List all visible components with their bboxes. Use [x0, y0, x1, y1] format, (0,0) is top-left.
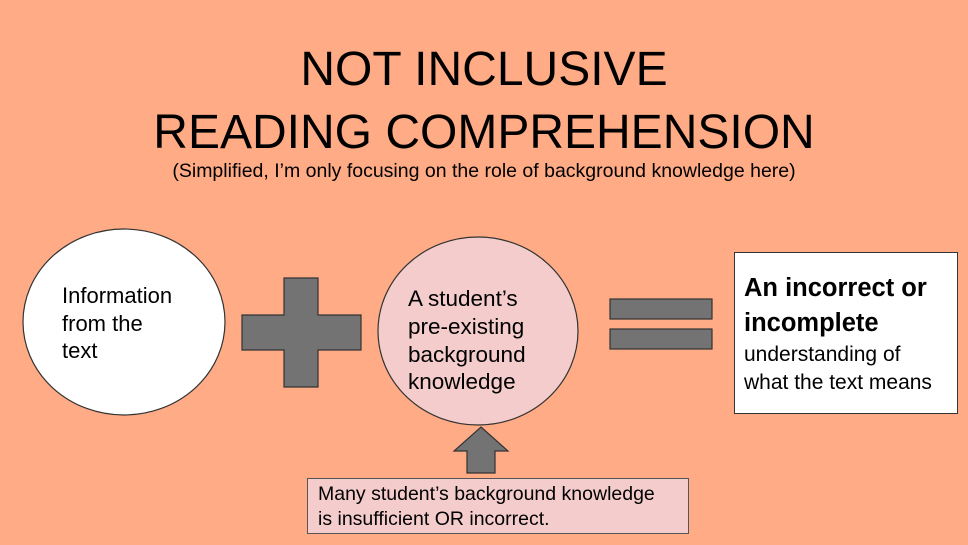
circle: information from the text: text: [62, 338, 97, 363]
circle: information from the text: Information: [62, 283, 172, 308]
callout box: Many student’s background knowledge: [318, 483, 655, 505]
icon: plus: [242, 278, 361, 387]
circle: background knowledge: A student’s: [408, 286, 518, 311]
circle: information from the text: [23, 229, 225, 415]
circle: information from the text: from the: [62, 311, 143, 336]
subtitle: (Simplified, I’m only focusing on the role of background knowledge here): [172, 160, 796, 182]
callout box: is insufficient OR incorrect.: [318, 508, 550, 530]
result box: An incorrect or: [744, 274, 927, 302]
title: NOT INCLUSIVE: [300, 43, 668, 96]
title: [153, 43, 815, 159]
callout box: [307, 478, 689, 534]
icon: equals: [610, 299, 712, 349]
result box: what the text means: [744, 371, 932, 394]
result box: incomplete: [744, 309, 879, 337]
result box: understanding of: [744, 343, 900, 366]
circle: background knowledge: pre-existing: [408, 314, 524, 339]
circle: background knowledge: knowledge: [408, 369, 516, 394]
arrow: up: [454, 427, 508, 473]
result box: [734, 252, 958, 414]
circle: background knowledge: [378, 237, 578, 425]
circle: background knowledge: background: [408, 342, 526, 367]
title: READING COMPREHENSION: [153, 106, 815, 159]
